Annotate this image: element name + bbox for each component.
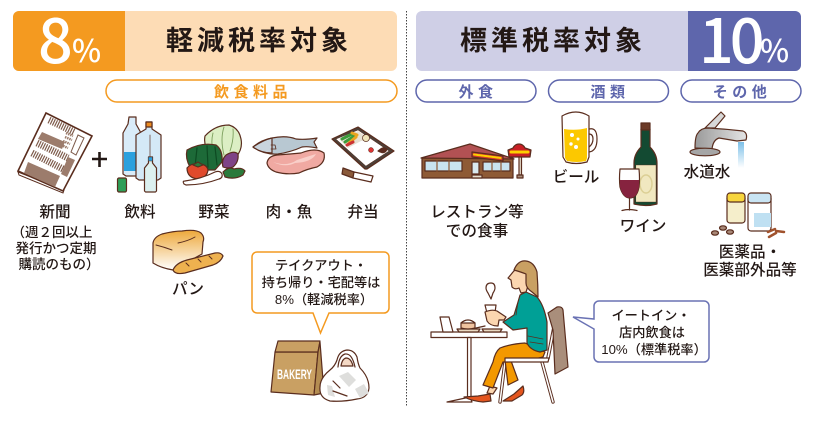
label: meat and fish: 肉・魚: [266, 202, 313, 221]
category pill: food and drink: [106, 80, 397, 102]
far leg and shoe: [503, 386, 524, 401]
chair: [500, 307, 568, 402]
near leg: [487, 386, 497, 394]
header: 10% standard tax rate: 標準税率対象: [460, 26, 646, 56]
plus sign: [92, 152, 107, 167]
thought drop: [486, 283, 495, 299]
icon: water tap: [690, 112, 747, 168]
label: newspaper: 新聞: [39, 203, 71, 221]
cup and hands: [485, 305, 496, 313]
category pill: eating out: [416, 80, 536, 102]
category pill: other: [681, 80, 801, 102]
icon: bento box: [332, 127, 394, 182]
header: 10% standard tax rate: [416, 0, 801, 81]
callout: eat-in is 10%: [573, 301, 709, 362]
icon: meat and fish: [253, 137, 324, 174]
label: beer: ビール: [553, 168, 599, 186]
label: medicine and quasi-drugs: 医薬部外品等: [703, 261, 797, 279]
label: drinks: 飲料: [124, 203, 156, 221]
label: newspaper subscription note: 購読のもの）: [18, 256, 100, 272]
category pill: food and drink: 飲食料品: [214, 83, 292, 101]
label: newspaper subscription note: 発行かつ定期: [16, 241, 96, 256]
label: newspaper subscription note: [12, 225, 100, 272]
icon: drink bottles: [118, 117, 161, 192]
header: 8% reduced tax rate: 軽減税率対象: [166, 26, 352, 56]
torso: [503, 292, 547, 352]
callout: takeout is 8%: [252, 252, 389, 333]
label: tap water: 水道水: [684, 163, 731, 181]
callout: takeout is 8%: テイクアウト・: [275, 258, 367, 273]
category pill: other: その他: [713, 84, 771, 101]
label: bento: 弁当: [347, 203, 379, 221]
callout: takeout is 8%: 8%（軽減税率）: [275, 291, 373, 307]
icon: medicine: [712, 193, 784, 237]
head and hair: [508, 268, 530, 293]
table: [431, 332, 507, 402]
category pill: alcohol: [548, 80, 668, 102]
callout: eat-in is 10%: 店内飲食は: [619, 325, 685, 340]
illustration: woman at cafe table: [431, 261, 568, 402]
photo frame, plates and food: [440, 317, 453, 332]
icon: beer mug: [562, 112, 597, 164]
category pill: alcohol: 酒類: [590, 84, 630, 101]
callout: takeout is 8%: 持ち帰り・宅配等は: [262, 274, 380, 290]
icon: restaurant: [421, 144, 531, 178]
icon: vegetables: [183, 125, 245, 185]
icon: bakery bag and plastic bag: [271, 341, 369, 401]
header: 8% reduced tax rate: %: [72, 26, 101, 71]
shoe: [464, 394, 491, 402]
header: 8% reduced tax rate: [13, 0, 397, 81]
label: newspaper subscription note: （週２回以上: [12, 225, 92, 240]
header: 10% standard tax rate: %: [760, 26, 789, 71]
callout: eat-in is 10%: 10%（標準税率）: [601, 342, 707, 357]
icon: wine bottle and glass: [620, 123, 657, 210]
label: wine: ワイン: [620, 218, 666, 235]
callout: eat-in is 10%: イートイン・: [611, 308, 691, 323]
label: restaurant: での食事: [446, 222, 508, 240]
label: vegetables: 野菜: [198, 203, 230, 221]
label: medicine and quasi-drugs: 医薬品・: [719, 243, 781, 261]
label: bread: パン: [172, 280, 204, 298]
label: medicine and quasi-drugs: [703, 243, 797, 279]
icon: newspaper: [18, 113, 92, 193]
label: restaurant: レストラン等: [430, 203, 524, 221]
icon: bakery bag and plastic bag: BAKERY: [277, 366, 312, 382]
chair seat: [505, 358, 549, 362]
label: restaurant: [430, 203, 524, 240]
category pill: eating out: 外食: [458, 83, 498, 101]
icon: bread: [153, 230, 223, 274]
